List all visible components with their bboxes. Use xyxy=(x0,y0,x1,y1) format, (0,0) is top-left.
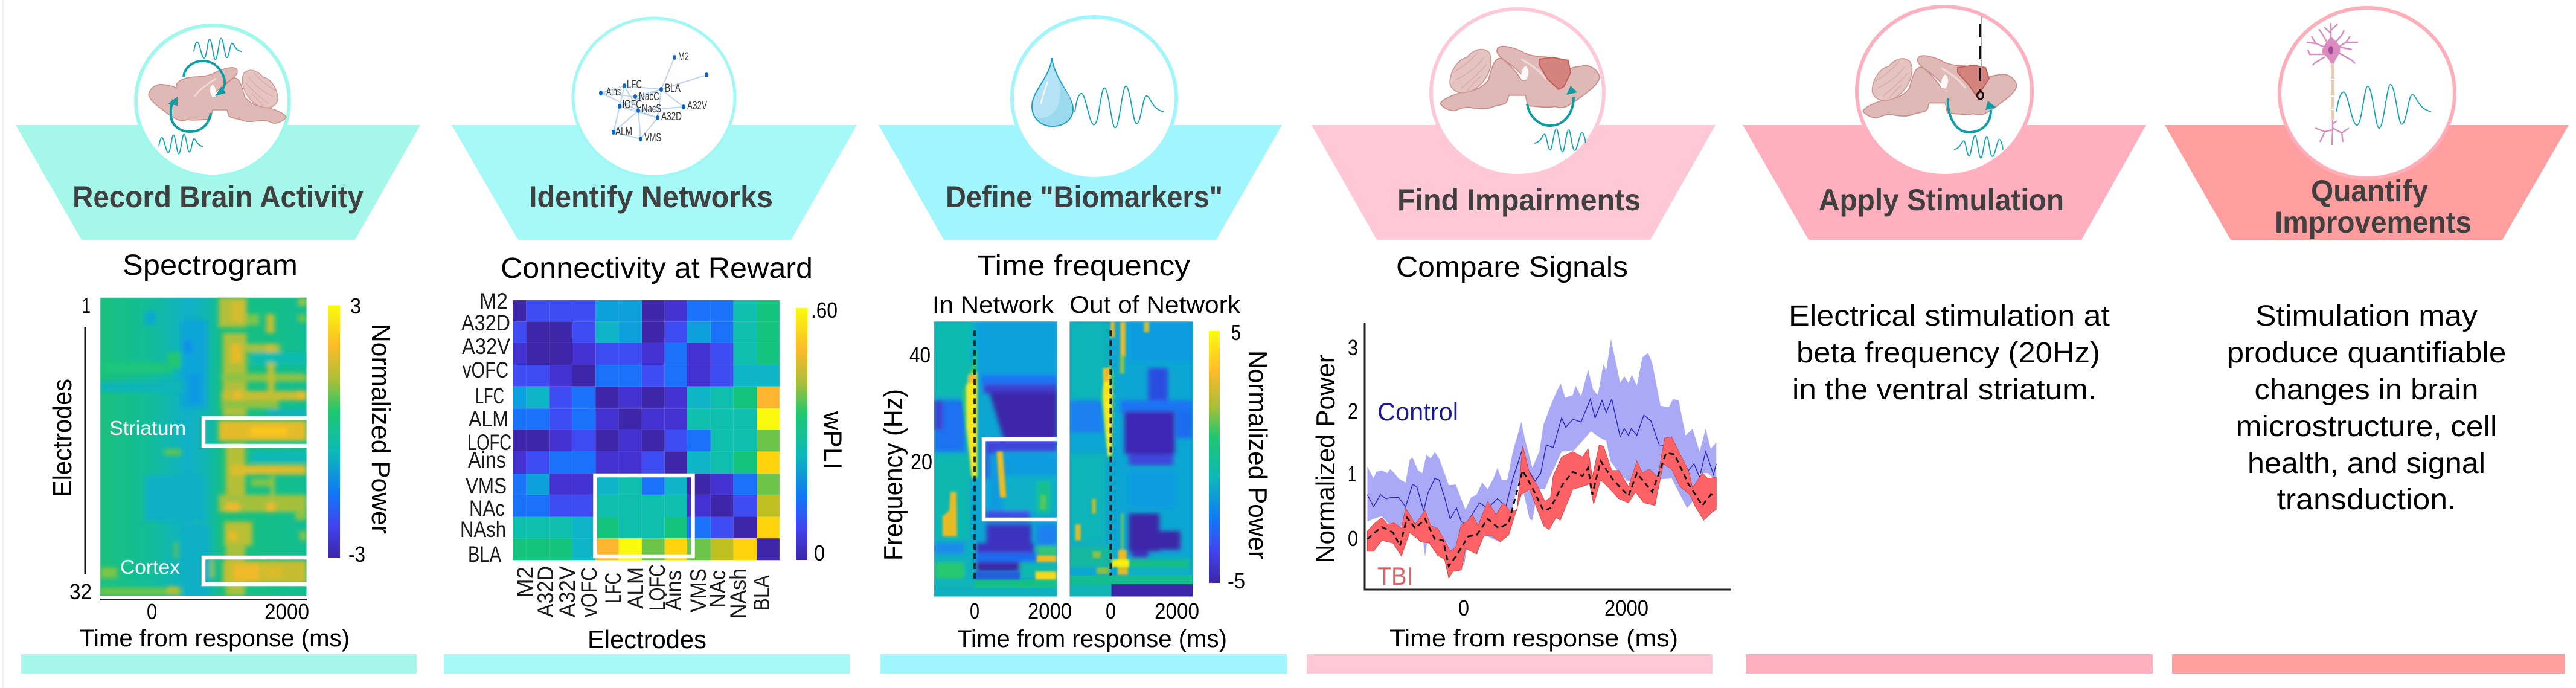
banner: identify networks xyxy=(452,125,857,240)
x axis ticks: 0 xyxy=(147,599,157,624)
banner: quantify improvements xyxy=(2165,125,2569,240)
x axis ticks xyxy=(147,599,309,624)
panel: find impairments xyxy=(1307,9,1731,674)
row ALM xyxy=(513,408,526,430)
x axis electrode labels: BLA xyxy=(749,575,774,611)
heading: quantify improvements: Quantify xyxy=(2311,174,2428,208)
footer bar xyxy=(444,654,850,674)
x axis electrode labels: NAc xyxy=(705,570,730,608)
row Ains xyxy=(513,452,526,474)
x axis ticks: 2000 xyxy=(264,599,309,624)
colorbar: normalized power: 3 xyxy=(350,294,361,318)
colorbar: normalized power: Normalized Power xyxy=(366,324,396,534)
colorbar: normalized power: -5 xyxy=(1228,568,1245,593)
icon: injured brain with oscillation xyxy=(1431,9,1604,176)
x axis label: electrodes: Electrodes xyxy=(588,625,706,654)
colorbar: normalized power xyxy=(328,294,396,567)
x axis electrode labels xyxy=(513,564,774,619)
text block: stimulation description: Electrical stimulation at xyxy=(1789,300,2110,332)
legend: control: Control xyxy=(1377,397,1458,426)
colorbar: normalized power: 5 xyxy=(1231,320,1241,345)
icon: network graph: NacS xyxy=(642,103,661,115)
text block: stimulation description: beta frequency (20Hz) xyxy=(1796,337,2100,369)
icon: network graph xyxy=(573,18,735,176)
row NAsh xyxy=(513,516,526,538)
x axis ticks xyxy=(1458,596,1648,620)
band: TBI error xyxy=(1367,437,1716,578)
x axis ticks: 0 xyxy=(970,599,979,623)
colorbar: normalized power xyxy=(1209,320,1272,593)
panel: identify networks xyxy=(444,18,857,674)
y axis electrode labels: NAc xyxy=(469,496,505,521)
x axis electrode labels: LFC xyxy=(601,573,626,603)
row A32D xyxy=(513,321,526,343)
icon: network graph: A32D xyxy=(661,111,682,123)
callout: beta frequency box xyxy=(984,439,1057,519)
colorbar: normalized power: -3 xyxy=(348,542,365,567)
axis line under spectrogram xyxy=(100,599,307,600)
label: electrode 32: 32 xyxy=(69,579,92,604)
banner: find impairments xyxy=(1312,125,1716,240)
label: out of network: Out of Network xyxy=(1069,292,1241,318)
y axis ticks: 3 xyxy=(1348,335,1358,360)
x axis electrode labels: VMS xyxy=(686,568,711,612)
banner: apply stimulation xyxy=(1743,125,2146,240)
icon: network graph: ALM xyxy=(615,126,632,138)
y axis electrode labels: A32D xyxy=(461,310,510,335)
band: control error xyxy=(1367,339,1716,566)
chart: in-network time frequency xyxy=(934,321,1057,596)
panel: quantify improvements xyxy=(2165,8,2569,674)
icon: network graph: A32V xyxy=(687,100,707,112)
chart: out-of-network time frequency xyxy=(1069,321,1193,596)
page edge line xyxy=(2,0,4,688)
row vOFC xyxy=(513,365,526,387)
icon: neuron with wave xyxy=(2280,8,2455,178)
icon: network graph: lOFC xyxy=(623,98,642,111)
icon: network graph: BLA xyxy=(665,82,681,95)
chart axes xyxy=(1365,323,1731,590)
subtitle: spectrogram: Spectrogram xyxy=(123,249,298,281)
y axis: frequency: Frequency (Hz) xyxy=(879,389,908,561)
heading: quantify improvements: Improvements xyxy=(2275,205,2472,239)
x axis electrode labels: NAsh xyxy=(726,568,751,619)
callout: striatum box: Striatum xyxy=(109,417,186,439)
x axis electrode labels: vOFC xyxy=(577,567,601,617)
label: in network: In Network xyxy=(932,292,1054,318)
x axis electrode labels: Ains xyxy=(661,570,686,611)
icon: network graph: M2 xyxy=(678,51,689,63)
banner: record brain activity xyxy=(16,125,420,240)
legend: TBI: TBI xyxy=(1377,562,1413,590)
text block: quantification description: Stimulation may xyxy=(2255,300,2478,332)
banner: define biomarkers xyxy=(879,125,1282,240)
footer bar xyxy=(1307,654,1713,674)
x axis electrode labels: M2 xyxy=(513,567,537,597)
heading: quantify improvements xyxy=(2275,174,2472,239)
x axis electrode labels: A32V xyxy=(555,566,580,617)
text block: quantification description xyxy=(2227,300,2506,516)
y axis electrode labels: LFC xyxy=(475,384,504,408)
y axis ticks: 0 xyxy=(1348,526,1358,551)
y axis ticks xyxy=(1348,335,1358,551)
callout: network box xyxy=(595,475,693,556)
icon: network graph: Ains xyxy=(606,86,621,98)
x axis label: Time from response (ms) xyxy=(1389,625,1678,652)
y axis: frequency: 40 xyxy=(909,342,931,367)
colorbar: wPLI: 0 xyxy=(814,541,825,565)
x axis ticks: 2000 xyxy=(1155,599,1199,623)
panel: apply stimulation xyxy=(1743,7,2153,674)
heading: apply stimulation: Apply Stimulation xyxy=(1819,183,2064,217)
row NAc xyxy=(513,495,526,516)
y axis electrode labels: vOFC xyxy=(463,358,508,382)
heading: find impairments: Find Impairments xyxy=(1397,183,1641,217)
subtitle: connectivity at reward: Connectivity at Reward xyxy=(501,252,813,285)
y axis label: Normalized Power xyxy=(1311,355,1341,563)
icon: water drop with wave xyxy=(1012,17,1176,179)
chart: control vs TBI power xyxy=(1367,339,1716,578)
line: TBI mean xyxy=(1367,453,1716,566)
x axis electrode labels: ALM xyxy=(623,567,648,609)
icon: network graph: LFC xyxy=(627,79,642,91)
icon: network graph: NacC xyxy=(639,91,659,103)
row LFC xyxy=(513,387,526,408)
y axis electrode labels: M2 xyxy=(479,289,508,313)
icon: brain with oscillations xyxy=(136,25,289,176)
y axis ticks: 1 xyxy=(1348,461,1356,486)
row M2 xyxy=(513,300,526,321)
row BLA xyxy=(513,538,526,560)
y axis electrode labels xyxy=(460,289,511,567)
subtitle: time frequency: Time frequency xyxy=(977,250,1190,282)
electrode range bar xyxy=(85,327,86,574)
callout: cortex box xyxy=(120,551,314,593)
footer bar xyxy=(2172,654,2565,674)
y axis electrode labels: A32V xyxy=(462,334,510,359)
footer bar xyxy=(880,654,1287,674)
text block: stimulation description xyxy=(1789,300,2110,406)
text block: quantification description: produce quantifiable xyxy=(2227,337,2506,369)
row A32V xyxy=(513,343,526,365)
y axis: frequency xyxy=(879,342,932,561)
y axis electrode labels: NAsh xyxy=(460,517,506,542)
footer bar xyxy=(21,654,417,674)
panel: define biomarkers xyxy=(879,17,1287,674)
text block: quantification description: microstructure, cell xyxy=(2235,411,2498,443)
x axis electrode labels: LOFC xyxy=(645,564,670,611)
line: control mean xyxy=(1367,399,1716,524)
x axis label: Time from response (ms) xyxy=(80,625,350,652)
y axis ticks: 2 xyxy=(1348,399,1358,423)
chart: connectivity matrix xyxy=(513,300,780,560)
heading: define biomarkers: Define "Biomarkers" xyxy=(946,180,1223,214)
text block: quantification description: changes in brain xyxy=(2255,374,2478,406)
x axis label: Time from response (ms) xyxy=(957,626,1227,652)
callout: cortex box: Cortex xyxy=(120,556,181,578)
x axis ticks: 2000 xyxy=(1604,596,1648,620)
y axis electrode labels: BLA xyxy=(468,542,501,567)
panel: record brain activity xyxy=(16,25,420,674)
row LOFC xyxy=(513,430,526,452)
x axis ticks: 0 xyxy=(1106,599,1116,623)
colorbar: wPLI: wPLI xyxy=(819,411,847,469)
chart: electrode spectrogram heatmap xyxy=(100,298,307,597)
callout: striatum box xyxy=(109,411,314,453)
label: electrode 1: 1 xyxy=(82,293,91,318)
subtitle: compare signals: Compare Signals xyxy=(1396,251,1628,283)
y axis electrode labels: LOFC xyxy=(467,430,511,455)
colorbar: normalized power: Normalized Power xyxy=(1243,350,1272,559)
icon: network graph: VMS xyxy=(644,132,661,144)
footer bar xyxy=(1746,654,2153,674)
colorbar: wPLI xyxy=(796,298,847,565)
y axis electrode labels: ALM xyxy=(469,407,508,431)
text block: quantification description: transduction. xyxy=(2276,484,2456,516)
heading: identify networks: Identify Networks xyxy=(529,180,773,214)
y axis: frequency: 20 xyxy=(911,449,932,474)
x axis electrode labels: A32D xyxy=(533,566,558,617)
text block: stimulation description: in the ventral striatum. xyxy=(1792,374,2097,406)
colorbar: wPLI: .60 xyxy=(811,298,838,323)
x axis ticks xyxy=(970,599,1199,623)
heading: record brain activity: Record Brain Activity xyxy=(72,180,364,214)
y axis electrode labels: VMS xyxy=(466,474,507,498)
x axis ticks: 2000 xyxy=(1028,599,1072,623)
row VMS xyxy=(513,474,526,495)
x axis ticks: 0 xyxy=(1458,596,1469,620)
y axis electrode labels: Ains xyxy=(468,448,506,472)
label: electrodes axis: Electrodes xyxy=(48,379,77,497)
text block: quantification description: health, and signal xyxy=(2248,448,2485,480)
icon: brain with stimulating electrode xyxy=(1857,7,2032,176)
